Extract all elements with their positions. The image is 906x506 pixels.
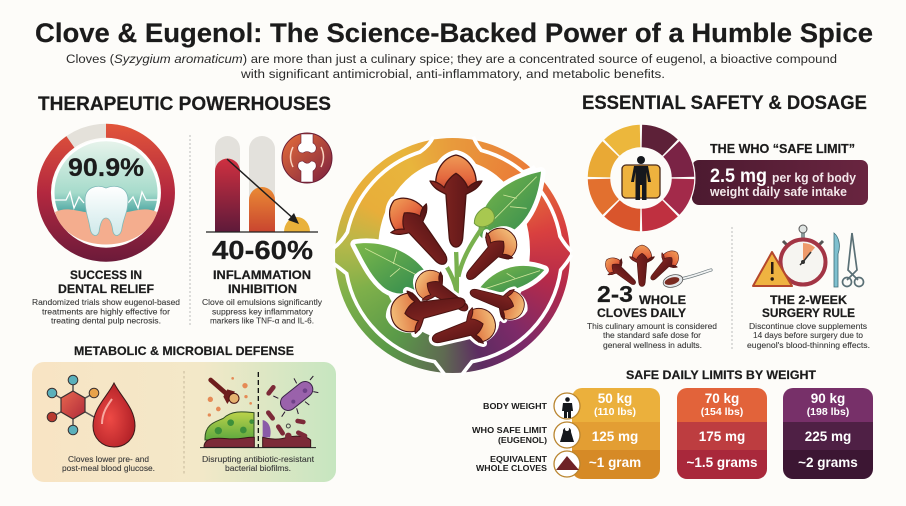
row labels: WHO SAFE LIMIT xyxy=(472,425,547,435)
card: 50 kg: 50 kg xyxy=(598,391,632,406)
card: 90 kg xyxy=(783,388,873,479)
card: 50 kg xyxy=(572,388,660,479)
icon: scalpel xyxy=(834,233,839,287)
panel: inflammation inhibition xyxy=(202,133,332,326)
callout: 2.5 mg per kg xyxy=(692,160,868,205)
card: 70 kg: ~1.5 grams xyxy=(687,455,757,470)
donut chart 90.9% xyxy=(44,131,168,255)
icon: joint xyxy=(282,133,332,183)
heading: inflammation inhibition: INHIBITION xyxy=(228,282,297,296)
heading: 2-3 whole cloves daily xyxy=(597,281,686,320)
row labels: EQUIVALENT xyxy=(490,454,547,464)
callout: 2.5 mg per kg: per kg of body xyxy=(772,171,856,185)
heading: success in dental relief: SUCCESS IN xyxy=(70,268,142,282)
bar chart xyxy=(206,136,318,232)
card: 90 kg: (198 lbs) xyxy=(807,406,849,418)
row labels: BODY WEIGHT xyxy=(483,401,547,411)
table: safe daily limits xyxy=(472,388,873,479)
arrow: downward trend xyxy=(227,159,299,224)
card: 90 kg: 225 mg xyxy=(805,429,851,444)
row labels xyxy=(472,401,547,473)
description: inflammation xyxy=(202,298,323,326)
heading: safe daily limits by weight: SAFE DAILY LIMITS BY WEIGHT xyxy=(626,368,817,382)
description: inflammation: Clove oil emulsions significantly xyxy=(202,298,323,307)
description: surgery rule: 14 days before surgery due to xyxy=(753,331,863,340)
description: dental relief: treating dental pulp necrosis. xyxy=(51,316,161,326)
description: inflammation: markers like TNF-α and IL-6. xyxy=(210,316,314,326)
description: surgery rule: Discontinue clove supplements xyxy=(749,322,867,331)
heading: metabolic and microbial defense: METABOLIC & MICROBIAL DEFENSE xyxy=(74,344,294,358)
description: whole cloves xyxy=(587,322,717,350)
icon: person xyxy=(554,393,580,419)
icon: weight xyxy=(554,422,580,448)
description: whole cloves: the standard safe dose for xyxy=(603,331,701,340)
heading: the 2-week surgery rule xyxy=(762,293,855,320)
caption: blood glucose xyxy=(62,455,155,473)
intro text: with significant antimicrobial, anti-inflammatory, and metabolic benefits. xyxy=(240,67,665,81)
card: 50 kg: 125 mg xyxy=(592,429,638,444)
icon: eugenol molecule xyxy=(47,375,99,435)
row labels: WHOLE CLOVES xyxy=(476,463,547,473)
heading: therapeutic powerhouses: THERAPEUTIC POWERHOUSES xyxy=(38,94,331,115)
row labels: (EUGENOL) xyxy=(498,435,547,445)
heading: the 2-week surgery rule: THE 2-WEEK xyxy=(770,293,847,307)
description: dental relief: treatments are highly effective for xyxy=(42,308,170,316)
intro text xyxy=(66,52,837,81)
color ring xyxy=(335,138,570,373)
card: 70 kg: 70 kg xyxy=(705,391,739,406)
icon: scissors xyxy=(842,233,864,286)
panel: whole cloves daily xyxy=(587,245,717,350)
plant illustration xyxy=(333,137,572,375)
heading: 2-3 whole cloves daily: CLOVES DAILY xyxy=(597,306,686,320)
icon: blood drop xyxy=(93,383,135,447)
card: 70 kg xyxy=(677,388,767,479)
panel: surgery rule xyxy=(747,225,870,350)
stat: 40-60%: 40-60% xyxy=(212,235,313,265)
heading: essential safety and dosage: ESSENTIAL SAFETY & DOSAGE xyxy=(582,93,867,114)
caption: biofilms: bacterial biofilms. xyxy=(225,464,291,473)
icon: clove disrupting biofilm xyxy=(200,372,318,448)
icon: three cloves and spoon xyxy=(600,245,711,292)
description: dental relief xyxy=(32,298,180,326)
description: whole cloves: This culinary amount is considered xyxy=(587,322,717,331)
callout: 2.5 mg per kg: 2.5 mg xyxy=(710,166,767,187)
panel: dental relief xyxy=(32,131,180,326)
icon: stopwatch xyxy=(780,225,826,284)
heading: success in dental relief xyxy=(58,268,154,296)
caption: blood glucose: Cloves lower pre- and xyxy=(68,455,149,464)
heading: the WHO safe limit: THE WHO “SAFE LIMIT” xyxy=(710,142,855,156)
caption: biofilms: Disrupting antibiotic-resistant xyxy=(202,455,315,464)
card: 90 kg: 90 kg xyxy=(811,391,845,406)
card: 50 kg: (110 lbs) xyxy=(594,406,636,418)
icon: person on scale xyxy=(622,156,660,200)
description: surgery rule: eugenol's blood-thinning effects. xyxy=(747,341,870,350)
card: 90 kg: ~2 grams xyxy=(798,455,858,470)
card: 70 kg: 175 mg xyxy=(699,429,745,444)
card: 50 kg: ~1 gram xyxy=(589,455,641,470)
heading: success in dental relief: DENTAL RELIEF xyxy=(58,282,154,296)
heading: inflammation inhibition xyxy=(213,268,311,296)
heading: inflammation inhibition: INFLAMMATION xyxy=(213,268,311,282)
stat: 90.9%: 90.9% xyxy=(68,154,144,182)
panel: metabolic and microbial defense xyxy=(32,362,336,482)
heading: the 2-week surgery rule: SURGERY RULE xyxy=(762,306,855,320)
intro text: Cloves ( Syzygium aromaticum ) are more than just a culinary spice; they are a concentrated source of eugenol, a bioactive compound xyxy=(66,52,837,66)
panel: WHO safe limit xyxy=(582,119,868,237)
title: Clove & Eugenol: The Science-Backed Power of a Humble Spice xyxy=(35,18,873,48)
description: inflammation: suppress key inflammatory xyxy=(212,308,314,316)
description: surgery rule xyxy=(747,322,870,350)
central clove emblem xyxy=(333,137,572,375)
icon: powder mound xyxy=(554,451,580,477)
card: 70 kg: (154 lbs) xyxy=(701,406,743,418)
segmented wheel xyxy=(582,119,700,237)
description: dental relief: Randomized trials show eugenol-based xyxy=(32,298,180,307)
heading: 2-3 whole cloves daily: 2-3 xyxy=(597,281,633,307)
description: whole cloves: general wellness in adults. xyxy=(603,341,702,350)
caption: biofilms xyxy=(202,455,315,473)
caption: blood glucose: post-meal blood glucose. xyxy=(62,464,155,473)
icon: warning triangle xyxy=(753,252,792,286)
callout: 2.5 mg per kg: weight daily safe intake xyxy=(709,185,847,199)
icon: tooth xyxy=(85,186,128,235)
heading: 2-3 whole cloves daily: WHOLE xyxy=(639,293,686,307)
